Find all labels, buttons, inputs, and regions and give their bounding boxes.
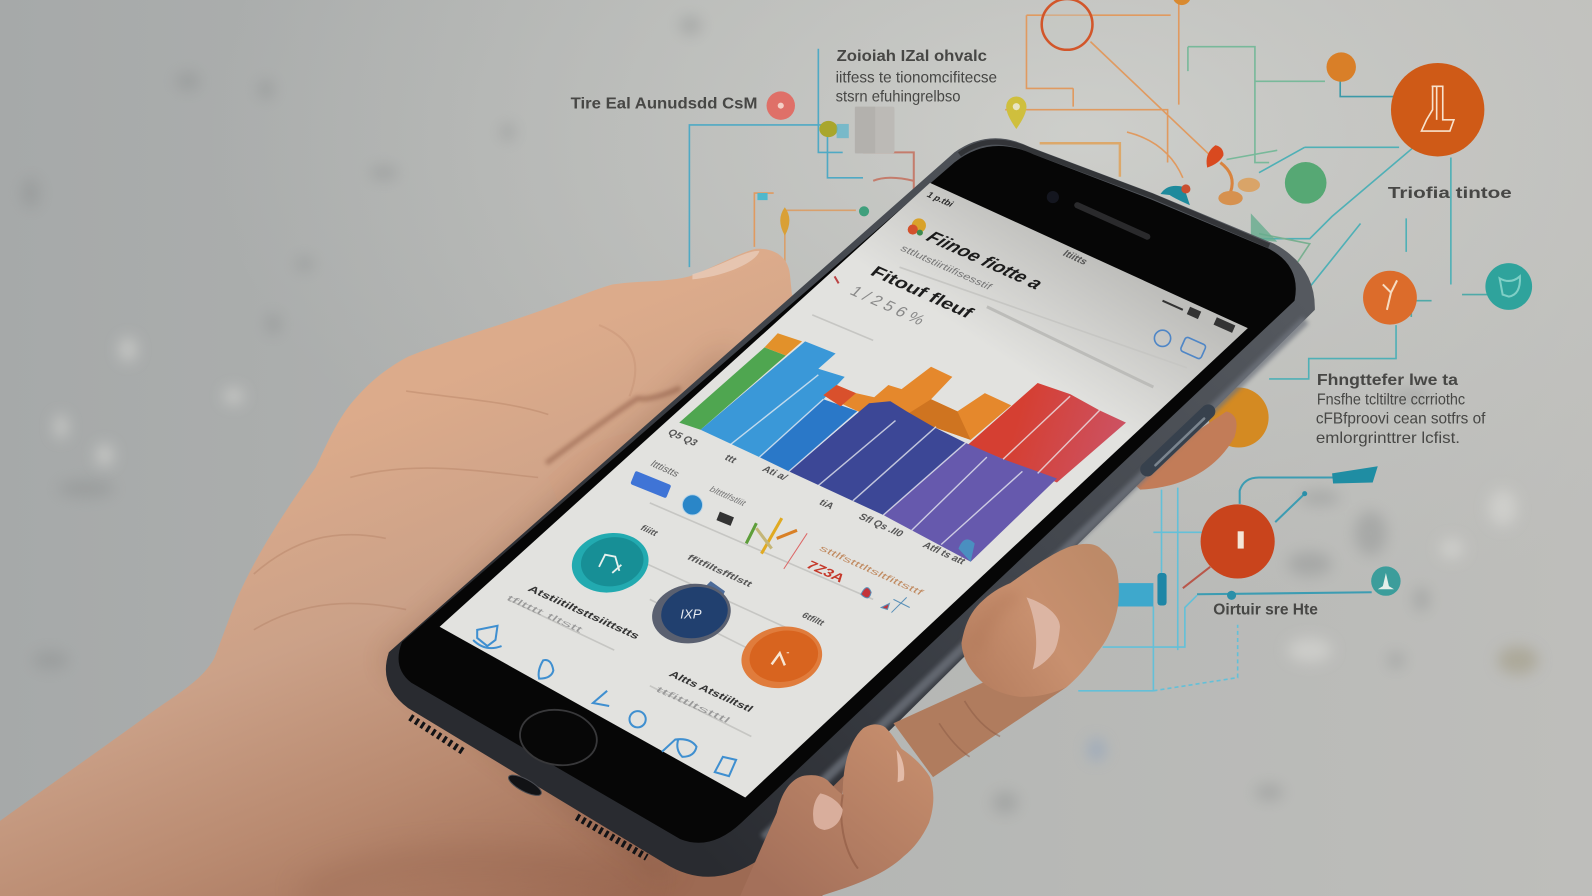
small nodes and blocks <box>757 97 1307 606</box>
nail two <box>897 750 904 782</box>
finger one pad shading <box>975 594 1020 650</box>
label: top block: iitfess te tionomcifitecse <box>836 69 997 86</box>
list item two: Altts Atstiiltstl <box>666 670 755 715</box>
label: right block <box>1316 372 1486 447</box>
nail one <box>1026 597 1060 669</box>
chart axis labels <box>665 428 968 567</box>
feature: teal <box>567 523 660 599</box>
label: top block: stsrn efuhingrelbso <box>836 89 960 106</box>
nail three <box>813 793 843 830</box>
port and grilles <box>410 717 647 857</box>
rim highlight <box>764 320 1306 838</box>
connector lines network <box>689 0 1492 691</box>
feature: teal: fiiitt <box>638 523 660 538</box>
feature: navy: IXP <box>680 607 702 622</box>
label: right block: cFBfproovi cean sotfrs of <box>1316 411 1486 428</box>
black icon <box>716 512 734 526</box>
list item one: Atstiitiltsttsiittstts <box>525 584 642 642</box>
label: left heading: Tire Eal Aunudsdd CsM <box>571 96 757 113</box>
chart axis labels: ttt <box>722 453 739 466</box>
colourful sketch <box>746 518 797 554</box>
feature: navy: ffitfiltsfftlstt <box>685 553 755 589</box>
phone <box>386 138 1315 877</box>
chart value: 1 / 2 5 6 % <box>846 283 929 328</box>
knuckle creases <box>939 701 1000 757</box>
label: right block: Fnsfhe tcltiltre ccrriothc <box>1317 391 1465 408</box>
home button <box>516 705 600 770</box>
fingers in front <box>740 544 1119 896</box>
circle: pink marker <box>767 91 795 120</box>
diagram circles <box>757 0 1532 606</box>
list item two <box>654 670 755 725</box>
chart title: Fitouf fleuf <box>866 262 978 322</box>
chart axis labels: Sfl Qs .Il0 <box>856 512 906 539</box>
chart axis labels: tiA <box>816 498 837 512</box>
badge <box>630 471 671 498</box>
blue drop <box>682 495 703 515</box>
bar chart <box>679 333 1126 562</box>
screen dividers <box>508 267 1187 737</box>
diagram labels <box>571 48 1512 619</box>
chart axis labels: Q5 Q3 <box>665 428 700 448</box>
feature: navy <box>647 553 755 649</box>
badge heading: ltttistts <box>648 459 681 479</box>
list item two: ttfittltstttl <box>654 685 732 725</box>
phone body <box>386 138 1315 877</box>
label: right heading: Triofia tintoe <box>1388 185 1512 202</box>
crease between fingers <box>841 794 858 869</box>
small chart tag <box>784 533 926 613</box>
chart axis labels: Atfl ts att <box>920 541 968 567</box>
circle: top amber <box>1173 0 1191 5</box>
side button <box>1147 411 1208 469</box>
label: bottom: Oirtuir sre Hte <box>1213 602 1318 619</box>
status icons <box>1163 301 1235 333</box>
camera <box>1047 191 1059 203</box>
circle: amber behind finger <box>1209 388 1269 447</box>
screen <box>440 183 1248 797</box>
feature: orange: 6tfiltt <box>800 611 827 627</box>
app status bar: 1 p.tbi <box>925 190 956 209</box>
chart axis labels: Ati a/ <box>759 464 790 483</box>
app logo <box>908 218 926 236</box>
label: right block: emlorgrinttrer lcfist. <box>1316 430 1460 447</box>
bottom nav icons <box>473 626 736 776</box>
label: right block: Fhngttefer lwe ta <box>1317 372 1459 389</box>
circle: amber top <box>1326 52 1356 82</box>
circle: orange medium with icon <box>1363 271 1417 325</box>
circle: teal with icon <box>1485 263 1532 310</box>
finger one <box>961 544 1119 697</box>
circle: red with bar <box>1201 504 1275 579</box>
circle: top outline <box>1042 0 1092 50</box>
circle: green <box>1285 162 1326 204</box>
legend text: blttttlfstliit <box>707 485 749 508</box>
label: top block <box>836 48 997 106</box>
list item one: tfltttt tltstt <box>504 593 586 635</box>
hand behind phone <box>0 249 1237 896</box>
arrow wedge <box>1332 466 1378 484</box>
finger web <box>893 683 1067 777</box>
label: top block: Zoioiah IZal ohvalc <box>837 48 987 65</box>
phone black face <box>399 146 1296 843</box>
small chart tag: 7Z3A <box>803 558 849 585</box>
small chart tag: sttlfstttltsltfittsttf <box>817 544 926 597</box>
circle: orange large with icon <box>1391 63 1484 156</box>
top rim shadow <box>959 142 1269 246</box>
list item one <box>504 584 642 642</box>
search icons <box>1154 330 1206 359</box>
speaker <box>1077 205 1147 237</box>
fingers two and three <box>740 724 933 896</box>
feature: orange <box>737 611 827 694</box>
legend row <box>630 459 797 554</box>
app right label: ltiitts <box>1060 249 1090 267</box>
circle: small teal <box>1371 566 1401 596</box>
app title: Fiinoe fiotte a <box>922 227 1047 293</box>
app subtitle: sttlutstiirtiifisesstif <box>898 244 994 292</box>
